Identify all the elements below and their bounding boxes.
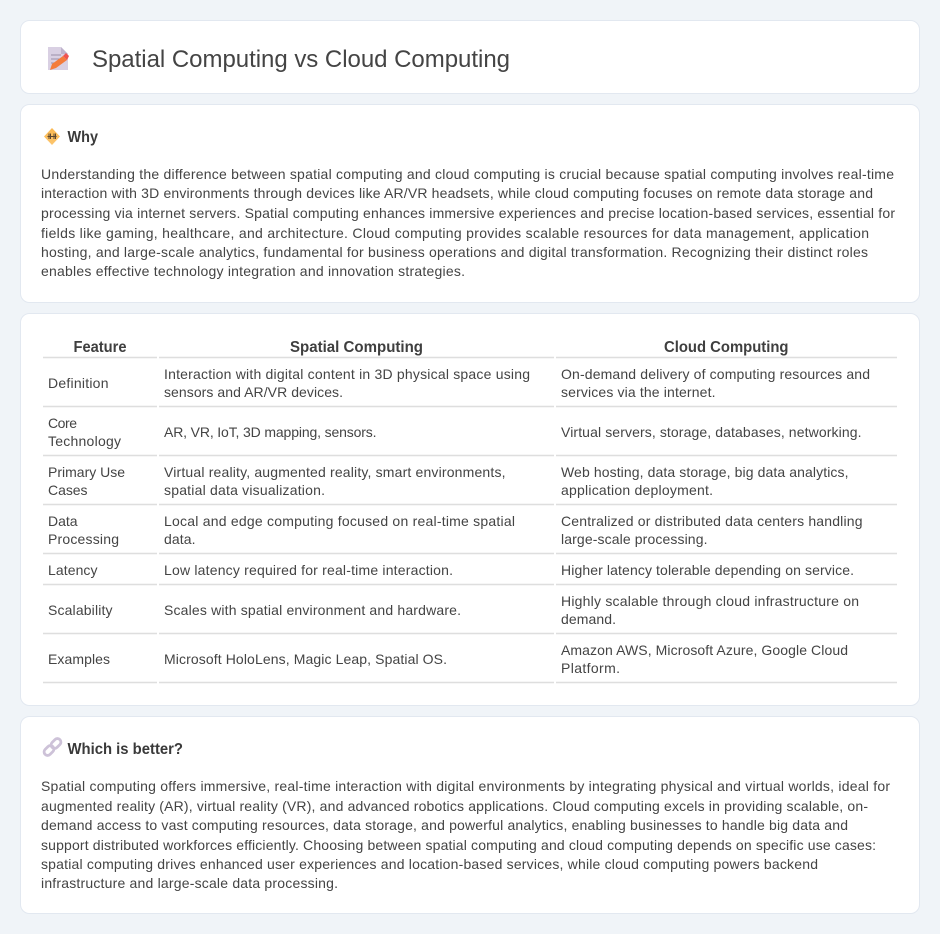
heading: which is better: Which is better? [68,741,183,758]
text block: why paragraph: Understanding the difference between spatial computing and cloud computing is crucial because spatial computing involves real-time [41,166,894,182]
table header: Feature [74,339,127,356]
text block: which paragraph: spatial computing drives enhanced user experiences and location-based services, while cloud computing powers backend [41,856,818,872]
row: examples: Amazon AWS, Microsoft Azure, Google Cloud [561,642,848,658]
row: examples [48,642,848,676]
text block: why paragraph: processing via internet servers. Spatial computing enhances immersive experiences and precise location-based services, essential for [41,205,895,221]
text block: why paragraph [41,166,895,279]
row: latency: Higher latency tolerable depending on service. [561,562,854,578]
row: core technology: AR, VR, IoT, 3D mapping, sensors. [164,424,376,440]
row: definition: On-demand delivery of computing resources and [561,366,870,382]
row: latency: Low latency required for real-time interaction. [164,562,453,578]
text block: why paragraph: fields like gaming, healthcare, and architecture. Cloud computing provides scalable resources for data management, application [41,225,869,241]
text block: which paragraph: Spatial computing offers immersive, real-time interaction with digital environments by integrating physical and virtual worlds, ideal for [41,778,890,794]
row: latency: Latency [48,562,98,578]
row: definition: services via the internet. [561,384,716,400]
row: scalability: Scales with spatial environment and hardware. [164,602,461,618]
text block: which paragraph: augmented reality (AR), virtual reality (VR), and advanced robotics applications. Cloud computing excels in providing scalable, on- [41,798,868,814]
table header: Spatial Computing [290,339,423,356]
row: definition [48,366,870,400]
panel: which is better [20,716,920,914]
icon: document with pencil [48,47,69,70]
text block: which paragraph: infrastructure and large-scale data processing. [41,875,338,891]
heading: why: Why [68,129,98,146]
panel: comparison table [20,314,920,706]
row: definition: Definition [48,375,108,391]
row: examples: Platform. [561,660,620,676]
row: primary use cases [48,464,848,498]
row: primary use cases: Web hosting, data storage, big data analytics, [561,464,848,480]
row: primary use cases: application deployment. [561,482,713,498]
row: data processing: Processing [48,531,119,547]
panel: header [20,20,920,94]
panel: why [20,104,920,302]
row: data processing: Data [48,513,78,529]
row: core technology: Technology [48,433,121,449]
text block: which paragraph [41,778,890,891]
row: data processing [48,513,862,547]
row: scalability [48,593,859,627]
row: core technology: Virtual servers, storage, databases, networking. [561,424,862,440]
text block: why paragraph: interaction with 3D environments through devices like AR/VR headsets, while cloud computing focuses on remote data storage and [41,185,873,201]
row: scalability: Scalability [48,602,112,618]
row: primary use cases: Primary Use [48,464,125,480]
row: core technology [48,415,862,449]
row: scalability: Highly scalable through cloud infrastructure on [561,593,859,609]
table header: Cloud Computing [664,339,788,356]
row: core technology: Core [48,415,77,431]
row: primary use cases: Virtual reality, augmented reality, smart environments, [164,464,506,480]
row: latency [48,562,854,578]
row: examples: Microsoft HoloLens, Magic Leap, Spatial OS. [164,651,447,667]
title: Spatial Computing vs Cloud Computing [92,46,510,73]
row: data processing: large-scale processing. [561,531,708,547]
icon: orange diamond [44,128,60,145]
text block: which paragraph: support distributed workforces efficiently. Choosing between spatial computing and cloud computing depends on specific use cases: [41,837,876,853]
row: primary use cases: Cases [48,482,88,498]
row: data processing: data. [164,531,196,547]
table header [74,339,788,356]
text block: why paragraph: hosting, and large-scale analytics, fundamental for business operations and digital transformation. Recognizing their distinct roles [41,244,868,260]
row: data processing: Local and edge computing focused on real-time spatial [164,513,515,529]
row: definition: sensors and AR/VR devices. [164,384,343,400]
text block: why paragraph: enables effective technology integration and innovation strategies. [41,263,465,279]
row: data processing: Centralized or distributed data centers handling [561,513,862,529]
row: examples: Examples [48,651,110,667]
text block: which paragraph: demand access to vast computing resources, data storage, and powerful analytics, enabling businesses to handle big data and [41,817,848,833]
row: definition: Interaction with digital content in 3D physical space using [164,366,530,382]
icon: link [43,737,62,757]
row: primary use cases: spatial data visualization. [164,482,325,498]
row: scalability: demand. [561,611,616,627]
